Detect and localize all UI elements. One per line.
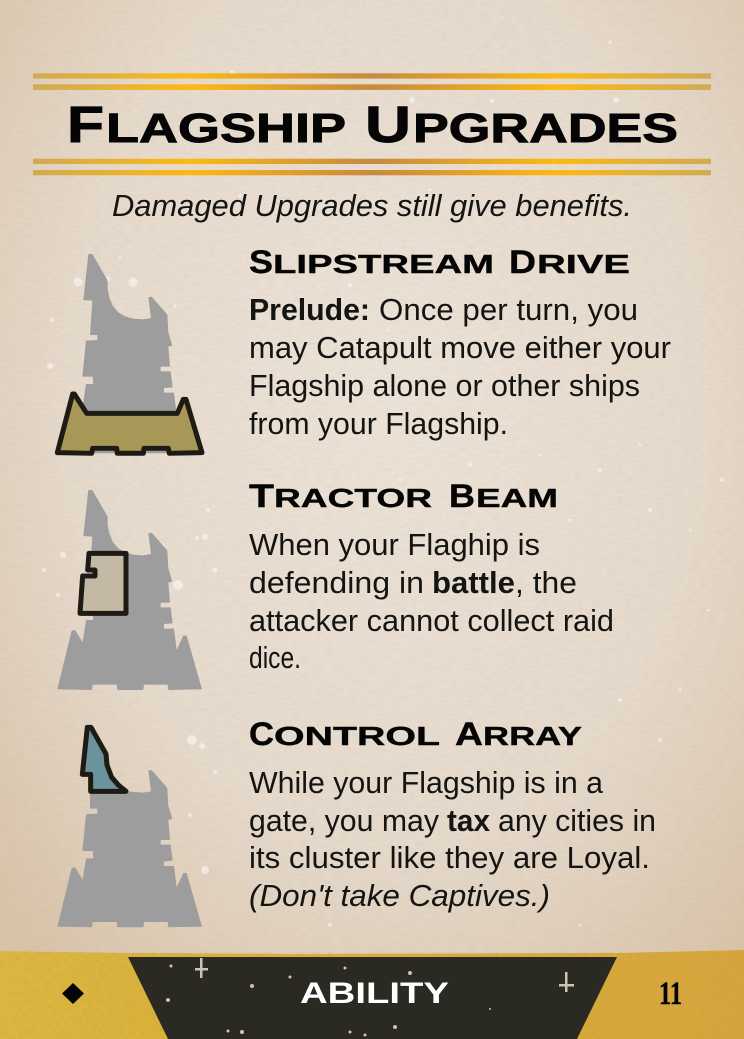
text: Tractor Beam rules: When your Flaghip is bbox=[249, 527, 540, 562]
heading: Control Array: RRAY bbox=[483, 721, 582, 751]
heading: Slipstream Drive: LIPSTREAM bbox=[273, 249, 494, 279]
title block with gold rules bbox=[33, 73, 711, 175]
footer label: ABILITY bbox=[300, 977, 449, 1010]
heading: Slipstream Drive: D bbox=[509, 244, 536, 280]
text: Control Array rules bbox=[249, 765, 656, 913]
footer: dark trapezoid bbox=[128, 957, 617, 1039]
heading: Slipstream Drive bbox=[249, 244, 630, 280]
text: Control Array rules: (Don't take Captives.) bbox=[249, 878, 550, 913]
text: Slipstream Drive rules: Flagship alone or other ships bbox=[249, 368, 640, 403]
heading: Control Array: ONTROL bbox=[274, 721, 440, 751]
heading: Slipstream Drive: S bbox=[249, 244, 273, 280]
heading: Control Array: C bbox=[249, 716, 274, 752]
text: Tractor Beam rules: defending in bbox=[249, 565, 424, 600]
text: Slipstream Drive rules: Once per turn, you bbox=[379, 292, 638, 327]
heading: Tractor Beam: B bbox=[449, 478, 475, 514]
page number: 11 bbox=[659, 976, 682, 1012]
text: Control Array rules: tax bbox=[447, 803, 491, 838]
icon: flagship with tractor beam section highlighted bbox=[57, 490, 202, 690]
text: Slipstream Drive rules: Prelude: bbox=[249, 292, 370, 327]
title: U bbox=[365, 96, 411, 153]
text: Tractor Beam rules: dice. bbox=[249, 640, 301, 675]
title: LAGSHIP bbox=[106, 105, 346, 151]
text: Control Array rules: gate, you may bbox=[249, 803, 439, 838]
icon: tractor beam section bbox=[80, 553, 126, 613]
subtitle: Damaged Upgrades still give benefits. bbox=[112, 188, 632, 223]
title: F bbox=[67, 96, 104, 153]
icon: flagship with control array section highlighted bbox=[57, 727, 202, 927]
text: Slipstream Drive rules bbox=[249, 292, 671, 441]
text: Control Array rules: any cities in bbox=[498, 803, 656, 838]
heading: Control Array bbox=[249, 716, 582, 752]
text: Control Array rules: While your Flagship is in a bbox=[249, 765, 604, 800]
heading: Tractor Beam bbox=[249, 478, 558, 514]
icon: diamond bbox=[62, 983, 84, 1004]
text: Slipstream Drive rules: from your Flagship. bbox=[249, 406, 508, 441]
text: Control Array rules: its cluster like they are Loyal. bbox=[249, 840, 650, 875]
text: Tractor Beam rules: battle bbox=[432, 565, 515, 600]
heading: Slipstream Drive: RIVE bbox=[537, 249, 630, 279]
text: Tractor Beam rules bbox=[249, 527, 614, 675]
footer band bbox=[0, 950, 744, 1039]
text: Tractor Beam rules: attacker cannot collect raid bbox=[249, 603, 614, 638]
title: PGRADES bbox=[413, 105, 678, 151]
heading: Tractor Beam: T bbox=[249, 478, 275, 514]
heading: Control Array: A bbox=[455, 716, 483, 752]
heading: Tractor Beam: EAM bbox=[476, 483, 558, 513]
heading: Tractor Beam: RACTOR bbox=[274, 483, 432, 513]
text: Slipstream Drive rules: may Catapult move either your bbox=[249, 330, 671, 365]
icon: flagship with engine section highlighted bbox=[57, 254, 202, 453]
icon: engine section bbox=[57, 394, 202, 453]
text: Tractor Beam rules: , the bbox=[515, 565, 577, 600]
icon: control array section bbox=[82, 727, 126, 791]
title bbox=[67, 96, 678, 153]
